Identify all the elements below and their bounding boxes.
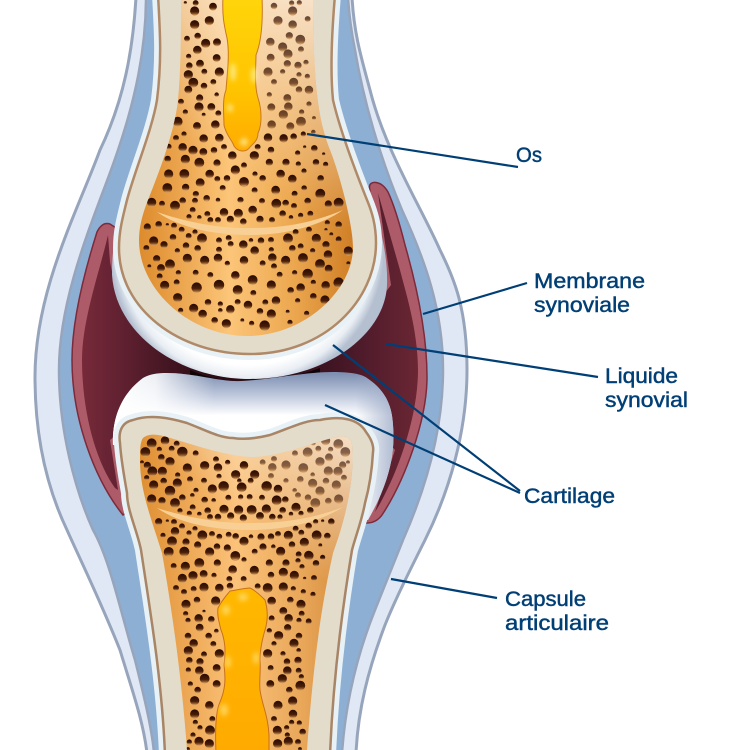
liquide synovial [82, 193, 418, 512]
pores: lower bone shaft [165, 547, 324, 750]
pores: upper bone shaft, pale right side [264, 1, 315, 134]
leader: Cartilage upper [333, 345, 520, 491]
label: Cartilage: Cartilage [524, 485, 615, 508]
moelle osseuse: lower [216, 588, 269, 750]
leader: Liquide synovial [386, 344, 598, 377]
leader: Os [307, 134, 518, 167]
label: Membrane synoviale [534, 270, 645, 317]
label: Os: Os [516, 144, 542, 167]
label: Capsule articulaire: articulaire [505, 612, 609, 635]
leader: Cartilage lower [325, 405, 520, 493]
capsule articulaire: outer pale layer [35, 0, 467, 750]
label: Liquide synovial: Liquide [605, 365, 678, 388]
leader lines [307, 134, 598, 598]
pores: upper bone shaft [165, 1, 328, 181]
os supérieur: compact bone [119, 0, 376, 354]
membrane synoviale: right [350, 182, 427, 524]
pores: lower bone head, orange side [141, 437, 334, 560]
label: Capsule articulaire [505, 588, 609, 635]
leader: Membrane synoviale [423, 283, 527, 314]
cartilage: upper bone [112, 205, 387, 379]
capsule inner blue layer [59, 0, 443, 750]
label: Liquide synovial: synovial [605, 389, 688, 412]
pores: lower bone head, pale side [260, 437, 350, 507]
label: Membrane synoviale: Membrane [534, 270, 645, 293]
label: Capsule articulaire: Capsule [505, 588, 586, 611]
os inférieur: outline [120, 417, 373, 750]
os inférieur: spongy bone [140, 435, 353, 750]
epiphyseal line: upper [157, 210, 343, 235]
os supérieur: outline [119, 0, 376, 354]
epiphyseal line: lower [157, 507, 343, 530]
cartilage: lower bone [113, 372, 393, 520]
os supérieur: spongy bone [139, 0, 353, 336]
os inférieur: compact bone [120, 417, 373, 750]
pores: upper bone head [144, 178, 352, 330]
label: Liquide synovial [605, 365, 688, 412]
moelle osseuse: upper [223, 0, 262, 151]
membrane synoviale: left [72, 223, 145, 515]
leader: Capsule articulaire [391, 579, 497, 598]
pores: upper bone shaft, lower [163, 175, 324, 202]
label: Membrane synoviale: synoviale [534, 294, 630, 317]
contact gap [190, 368, 320, 385]
